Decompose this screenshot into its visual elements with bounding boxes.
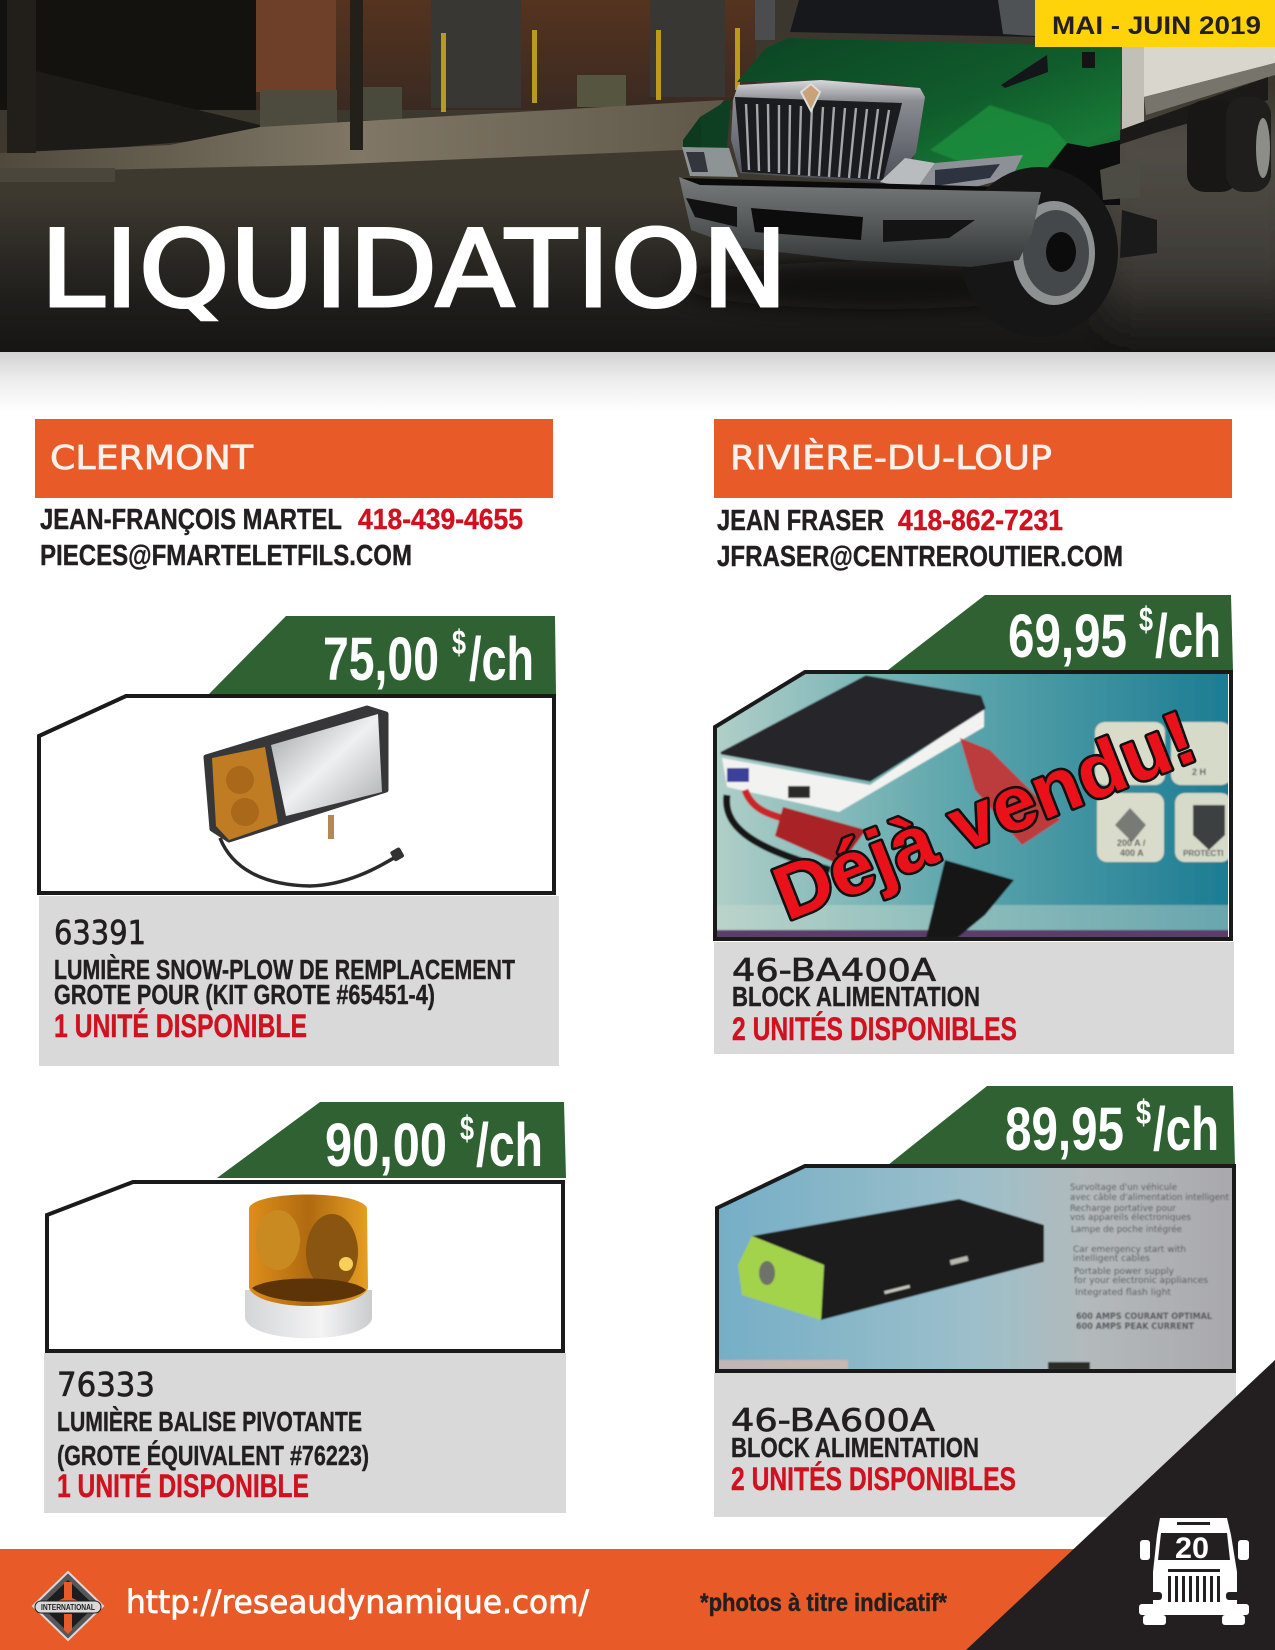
info block: 63391 — [54, 913, 146, 952]
price tag: 75,00 — [323, 625, 439, 693]
price tag: 89,95 — [1005, 1095, 1124, 1163]
title: LIQUIDATION — [40, 208, 788, 331]
product photo: green power bank: Recharge portative pour — [1070, 1204, 1177, 1214]
product photo: green power bank: avec câble d'alimentation intelligent — [1070, 1193, 1230, 1203]
heading: Clermont: CLERMONT — [50, 438, 254, 477]
panel: product 76333 — [44, 1102, 566, 1513]
contact details: JEAN-FRANÇOIS MARTEL — [40, 504, 342, 536]
price tag: /ch — [469, 625, 534, 693]
heading: Rivière-du-Loup — [714, 419, 1232, 498]
header fade band — [0, 352, 1275, 412]
product photo: power bank: 2 H — [1192, 767, 1206, 777]
icon: truck with route 20 — [1139, 1518, 1249, 1625]
info block: BLOCK ALIMENTATION — [732, 981, 980, 1012]
footer band — [0, 1549, 1275, 1650]
price tag — [888, 1086, 1235, 1165]
date badge — [1035, 0, 1275, 47]
info block: 1 UNITÉ DISPONIBLE — [57, 1468, 309, 1504]
contact details: 418-862-7231 — [898, 505, 1063, 537]
info block — [714, 1373, 1236, 1517]
panel: product 46-BA400A — [714, 595, 1234, 1054]
info block: 1 UNITÉ DISPONIBLE — [54, 1008, 307, 1044]
info block: 46-BA600A — [731, 1403, 935, 1439]
info block: 46-BA400A — [732, 953, 936, 989]
truck — [679, 0, 1275, 337]
info block: 2 UNITÉS DISPONIBLES — [732, 1011, 1017, 1047]
info block: BLOCK ALIMENTATION — [731, 1432, 979, 1463]
product photo: power bank: 400 A — [1120, 848, 1144, 858]
product photo: green power bank: Car emergency start with — [1073, 1245, 1186, 1255]
icon: International logo — [33, 1572, 103, 1640]
price tag — [217, 1102, 566, 1179]
contact details — [717, 505, 1123, 573]
header photo: truck on street — [0, 0, 1275, 352]
product photo: power bank: 200 A / — [1117, 838, 1146, 848]
info block: 76333 — [57, 1365, 155, 1404]
info block: LUMIÈRE SNOW-PLOW DE REMPLACEMENT — [54, 954, 515, 985]
price tag: $ — [1136, 1094, 1151, 1132]
product photo: green power bank: Integrated flash light — [1075, 1288, 1172, 1298]
price tag: 69,95 — [1008, 602, 1127, 670]
product photo: green power bank: Portable power supply — [1074, 1267, 1174, 1277]
price tag — [208, 616, 556, 695]
price tag: /ch — [1155, 602, 1221, 670]
price tag: $ — [1139, 601, 1153, 639]
icon: truck with route 20: 20 — [1175, 1532, 1209, 1565]
icon: International logo: INTERNATIONAL — [41, 1603, 95, 1612]
product photo: green power bank — [714, 1165, 1236, 1371]
product photo: green power bank: Lampe de poche intégrée — [1071, 1224, 1182, 1235]
product photo: power bank — [714, 670, 1234, 942]
info block: LUMIÈRE BALISE PIVOTANTE — [57, 1406, 362, 1437]
panel: product 46-BA600A — [714, 1086, 1236, 1517]
panel: Rivière-du-Loup contact — [714, 419, 1232, 573]
product photo: green power bank: 600 AMPS PEAK CURRENT — [1076, 1322, 1194, 1332]
contact details: PIECES@FMARTELETFILS.COM — [40, 540, 412, 572]
corner triangle — [966, 1360, 1275, 1650]
info block — [714, 942, 1234, 1054]
product photo: green power bank: for your electronic appliances — [1074, 1276, 1209, 1286]
price tag: /ch — [1153, 1095, 1219, 1163]
info block — [39, 896, 559, 1066]
panel: Clermont contact — [35, 419, 553, 572]
info block: GROTE POUR (KIT GROTE #65451-4) — [54, 979, 435, 1010]
panel: product 63391 — [39, 616, 559, 1066]
icon: snow-plow lamp — [206, 708, 405, 886]
info block — [44, 1353, 566, 1513]
website link: http://reseaudynamique.com/ — [126, 1583, 589, 1621]
heading: Clermont — [35, 419, 553, 498]
contact details: JEAN FRASER — [717, 505, 884, 537]
product photo: power bank: PROTECTI — [1183, 849, 1223, 858]
icon: rotating beacon — [245, 1194, 372, 1338]
info block: (GROTE ÉQUIVALENT #76223) — [57, 1440, 369, 1471]
heading: Rivière-du-Loup: RIVIÈRE-DU-LOUP — [730, 437, 1052, 477]
price tag: 90,00 — [325, 1111, 447, 1179]
price tag: $ — [452, 624, 466, 662]
product photo: green power bank: intelligent cables — [1073, 1254, 1151, 1264]
sold-out stamp: Déjà vendu! — [762, 695, 1207, 937]
photo disclaimer: *photos à titre indicatif* — [700, 1589, 947, 1617]
product photo: green power bank: Survoltage d'un véhicule — [1070, 1182, 1177, 1193]
contact details: JFRASER@CENTREROUTIER.COM — [717, 541, 1123, 573]
product photo: green power bank: 600 AMPS COURANT OPTIMAL — [1076, 1312, 1213, 1322]
contact details: 418-439-4655 — [358, 504, 523, 536]
price tag — [888, 595, 1233, 670]
product frame — [47, 1182, 563, 1351]
date badge: MAI - JUIN 2019 — [1052, 12, 1261, 40]
contact details — [40, 504, 523, 572]
product frame — [39, 696, 554, 893]
info block: 2 UNITÉS DISPONIBLES — [731, 1461, 1016, 1497]
price tag: $ — [460, 1110, 474, 1148]
product photo: green power bank: vos appareils électroniques — [1070, 1212, 1192, 1223]
price tag: /ch — [476, 1111, 543, 1179]
